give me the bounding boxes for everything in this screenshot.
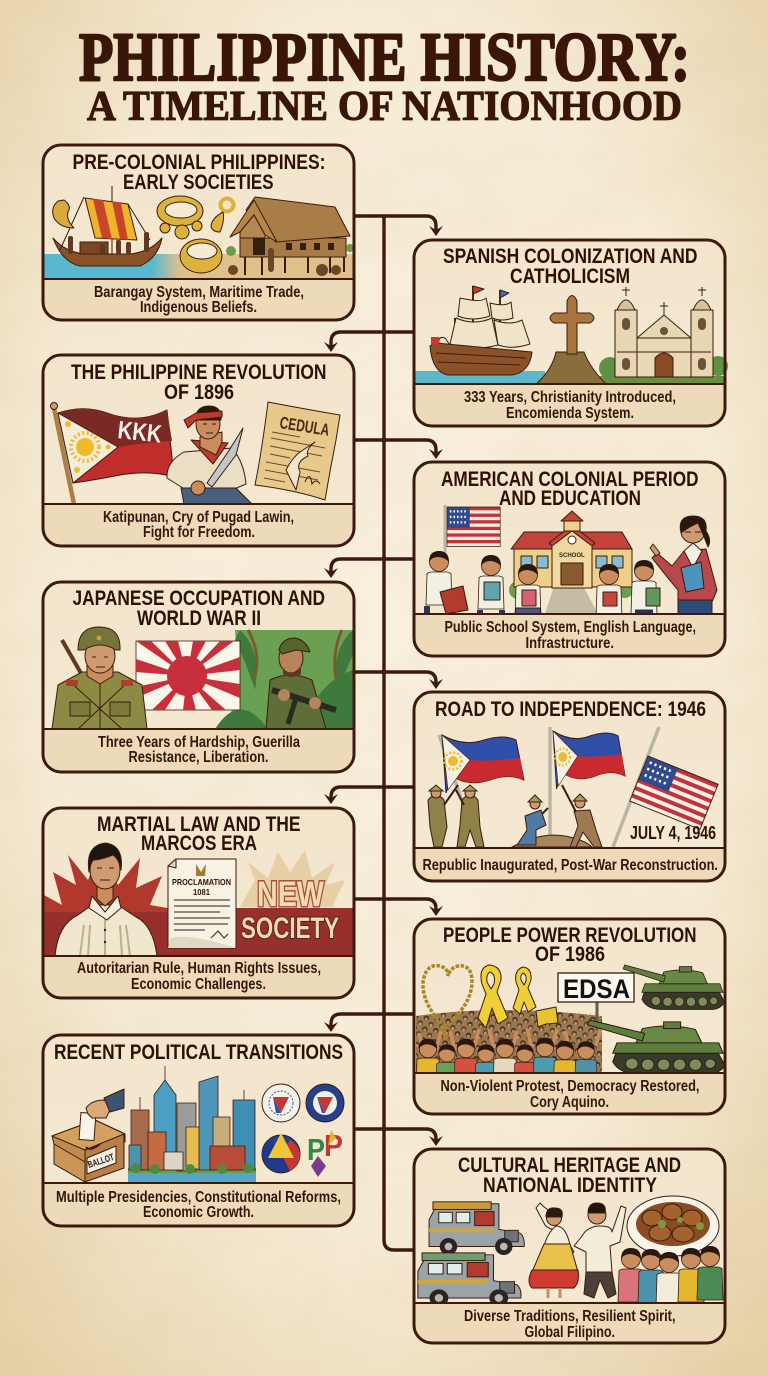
caption	[464, 1308, 676, 1341]
heading: MARTIAL LAW AND THE	[97, 812, 300, 836]
illustration: KKK flag, revolutionary and torn cedula: CEDULA	[278, 413, 331, 440]
heading: RECENT POLITICAL TRANSITIONS	[54, 1040, 343, 1064]
heading	[458, 1153, 681, 1197]
caption: Resistance, Liberation.	[128, 749, 268, 766]
illustration: ballot box, skyline and party seals: BALLOT	[87, 1152, 116, 1171]
illustration: Marcos, Proclamation 1081 and New Society: 1081	[193, 887, 210, 897]
caption	[98, 734, 300, 766]
illustration: ballot box, skyline and party seals: P	[324, 1128, 343, 1163]
illustration: soldier, rising sun flag and guerilla	[52, 627, 353, 729]
heading: PEOPLE POWER REVOLUTION	[443, 923, 696, 947]
caption: Public School System, English Language,	[444, 619, 696, 636]
illustration: Marcos, Proclamation 1081 and New Society: NEW	[257, 875, 324, 914]
caption: Katipunan, Cry of Pugad Lawin,	[103, 509, 294, 526]
illustration: KKK flag, revolutionary and torn cedula: KKK	[116, 416, 163, 449]
heading: CATHOLICISM	[510, 264, 630, 288]
panel: cultural heritage	[414, 1149, 725, 1343]
panel: Japanese occupation	[43, 582, 354, 772]
timeline connectors	[324, 216, 443, 1250]
illustration: Marcos, Proclamation 1081 and New Society: SOCIETY	[241, 912, 339, 945]
heading: THE PHILIPPINE REVOLUTION	[71, 360, 326, 384]
illustration: boat, gold and stilt house	[44, 186, 354, 279]
caption: Autoritarian Rule, Human Rights Issues,	[77, 960, 321, 977]
illustration: galleon, cross and church	[415, 286, 728, 384]
caption	[77, 960, 321, 993]
caption: Cory Aquino.	[530, 1094, 609, 1111]
illustration: flag, schoolhouse, students and teacher: SCHOOL	[559, 553, 585, 559]
caption	[440, 1078, 700, 1111]
caption	[103, 509, 294, 541]
caption: Multiple Presidencies, Constitutional Reforms,	[56, 1189, 341, 1206]
caption: Non-Violent Protest, Democracy Restored,	[440, 1078, 700, 1095]
caption	[56, 1189, 341, 1221]
panel: martial law	[43, 808, 354, 998]
caption: Diverse Traditions, Resilient Spirit,	[464, 1308, 676, 1325]
illustration: KKK flag, revolutionary and torn cedula	[50, 402, 340, 504]
caption	[464, 389, 676, 422]
caption: Infrastructure.	[526, 635, 614, 652]
panel: Philippine Revolution	[43, 355, 354, 546]
panel: recent political transitions	[43, 1035, 354, 1226]
caption	[444, 619, 696, 652]
title	[79, 19, 690, 130]
caption: Fight for Freedom.	[143, 524, 255, 541]
illustration: ballot box, skyline and party seals	[52, 1066, 344, 1183]
caption: Three Years of Hardship, Guerilla	[98, 734, 300, 751]
caption: Economic Challenges.	[131, 976, 266, 993]
heading: PRE-COLONIAL PHILIPPINES:	[72, 150, 326, 174]
heading	[97, 812, 300, 855]
illustration: flag raising and date: JULY 4, 1946	[630, 823, 716, 843]
caption: Economic Growth.	[143, 1204, 254, 1221]
caption: Global Filipino.	[524, 1324, 615, 1341]
caption: Barangay System, Maritime Trade,	[94, 284, 304, 301]
illustration: flag raising and date	[428, 727, 718, 847]
caption: Encomienda System.	[506, 405, 634, 422]
panel: American colonial period	[414, 462, 725, 656]
heading	[72, 150, 326, 194]
illustration: flag, schoolhouse, students and teacher	[426, 505, 717, 618]
heading: SPANISH COLONIZATION AND	[443, 244, 698, 268]
illustration: rosary, ribbons, EDSA sign, crowd and tanks: EDSA	[563, 974, 630, 1004]
heading: AND EDUCATION	[499, 486, 641, 510]
heading: MARCOS ERA	[141, 831, 257, 855]
heading: OF 1896	[164, 380, 234, 404]
panel: People Power	[414, 919, 725, 1114]
illustration: jeepneys, dancers, food and people	[418, 1196, 723, 1307]
heading: WORLD WAR II	[137, 606, 261, 630]
title: A TIMELINE OF NATIONHOOD	[87, 84, 682, 130]
heading: JAPANESE OCCUPATION AND	[72, 586, 325, 610]
heading: ROAD TO INDEPENDENCE: 1946	[435, 697, 706, 721]
caption: 333 Years, Christianity Introduced,	[464, 389, 676, 406]
panel: pre-colonial Philippines	[43, 145, 354, 320]
heading: OF 1986	[535, 942, 605, 966]
heading: AMERICAN COLONIAL PERIOD	[441, 467, 698, 491]
panel: Spanish colonization	[414, 240, 728, 426]
illustration: rosary, ribbons, EDSA sign, crowd and tanks	[416, 965, 725, 1091]
heading	[72, 586, 325, 630]
heading: NATIONAL IDENTITY	[483, 1173, 657, 1197]
heading	[71, 360, 326, 404]
heading: EARLY SOCIETIES	[123, 170, 274, 194]
panel: road to independence	[414, 692, 725, 881]
illustration: Marcos, Proclamation 1081 and New Society	[44, 843, 353, 956]
heading	[441, 467, 698, 510]
caption: Indigenous Beliefs.	[140, 299, 257, 316]
heading: CULTURAL HERITAGE AND	[458, 1153, 681, 1177]
illustration: ballot box, skyline and party seals: P	[307, 1132, 325, 1167]
caption	[94, 284, 304, 316]
heading	[443, 923, 696, 966]
heading	[443, 244, 698, 288]
illustration: Marcos, Proclamation 1081 and New Society: PROCLAMATION	[172, 877, 231, 887]
